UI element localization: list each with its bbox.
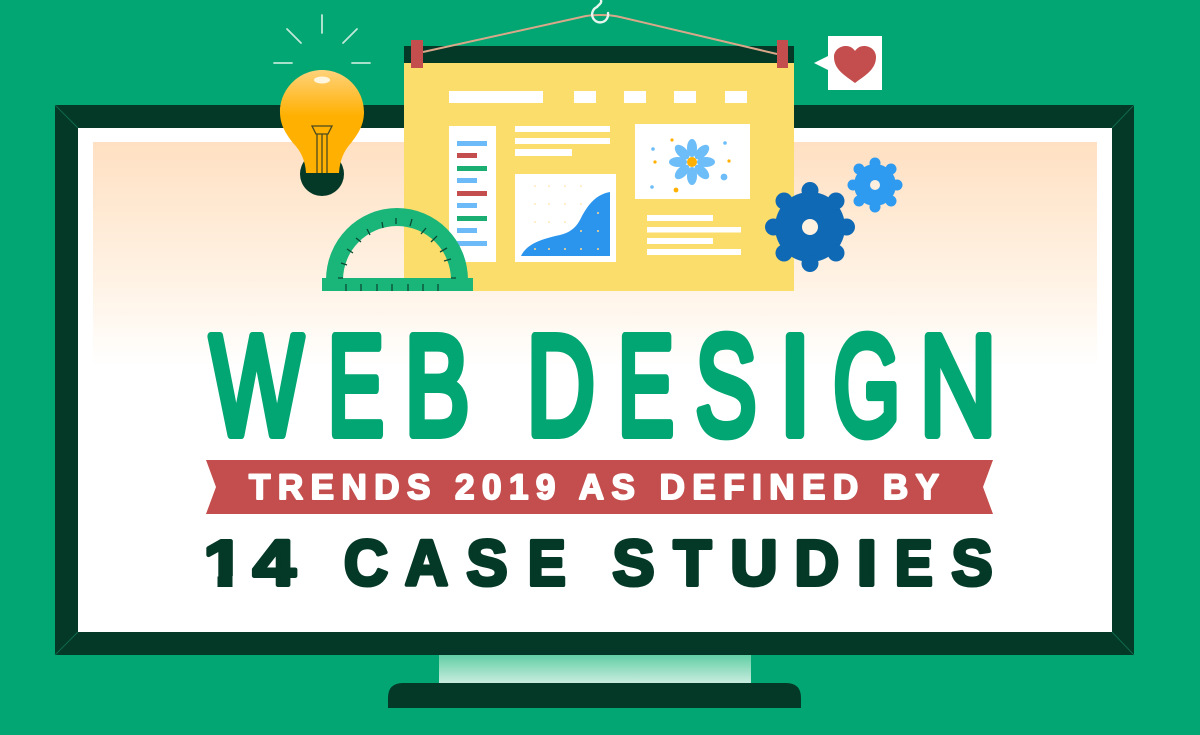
subtitle: 14 case studies: S xyxy=(466,527,508,599)
numeral foot mask xyxy=(203,576,248,590)
poster flower image xyxy=(635,124,750,199)
title: web design: S xyxy=(695,306,757,466)
right clip xyxy=(777,40,788,68)
subtitle: 14 case studies: D xyxy=(794,527,839,599)
title: web design: I xyxy=(779,306,811,466)
icon: large gear xyxy=(765,182,855,272)
poster nav xyxy=(449,91,747,103)
peach screen gradient xyxy=(93,142,1097,367)
poster text lines xyxy=(515,126,610,156)
hanging poster xyxy=(404,0,794,291)
subtitle: 14 case studies: I xyxy=(857,527,877,599)
subtitle: 14 case studies: 4 xyxy=(253,527,296,599)
subtitle: 14 case studies: A xyxy=(405,527,448,599)
icon: protractor xyxy=(322,208,473,291)
monitor stand xyxy=(388,655,801,708)
subtitle: 14 case studies: 1 xyxy=(204,527,244,599)
icon: light bulb xyxy=(274,15,370,196)
left clip xyxy=(411,40,423,68)
monitor frame xyxy=(55,105,1134,655)
subtitle: 14 case studies: T xyxy=(674,527,711,599)
poster board xyxy=(404,63,794,291)
icon: small gear xyxy=(848,158,902,212)
subtitle: 14 case studies: E xyxy=(895,527,933,599)
subtitle: 14 case studies: E xyxy=(528,527,566,599)
hanging cord xyxy=(423,15,777,54)
title: web design: E xyxy=(618,306,674,466)
title: web design: N xyxy=(919,306,997,466)
red ribbon banner xyxy=(206,460,993,514)
title: web design: D xyxy=(527,306,595,466)
subtitle: 14 case studies: C xyxy=(344,527,388,599)
light rays xyxy=(274,15,370,63)
subtitle: 14 case studies: S xyxy=(952,527,992,599)
poster lower text lines xyxy=(647,215,741,255)
poster area chart xyxy=(515,174,616,262)
hook xyxy=(592,0,608,22)
title: web design: G xyxy=(833,306,900,466)
subtitle: TRENDS 2019 AS DEFINED BY xyxy=(249,468,939,507)
title: web design: E xyxy=(328,306,384,466)
poster sidebar xyxy=(449,126,496,262)
icon: heart speech bubble xyxy=(814,36,882,90)
subtitle: 14 case studies: S xyxy=(612,527,654,599)
poster top bar xyxy=(404,46,794,63)
subtitle: 14 case studies: U xyxy=(730,527,778,599)
title: web design: W xyxy=(210,306,303,466)
title: web design: B xyxy=(404,306,470,466)
